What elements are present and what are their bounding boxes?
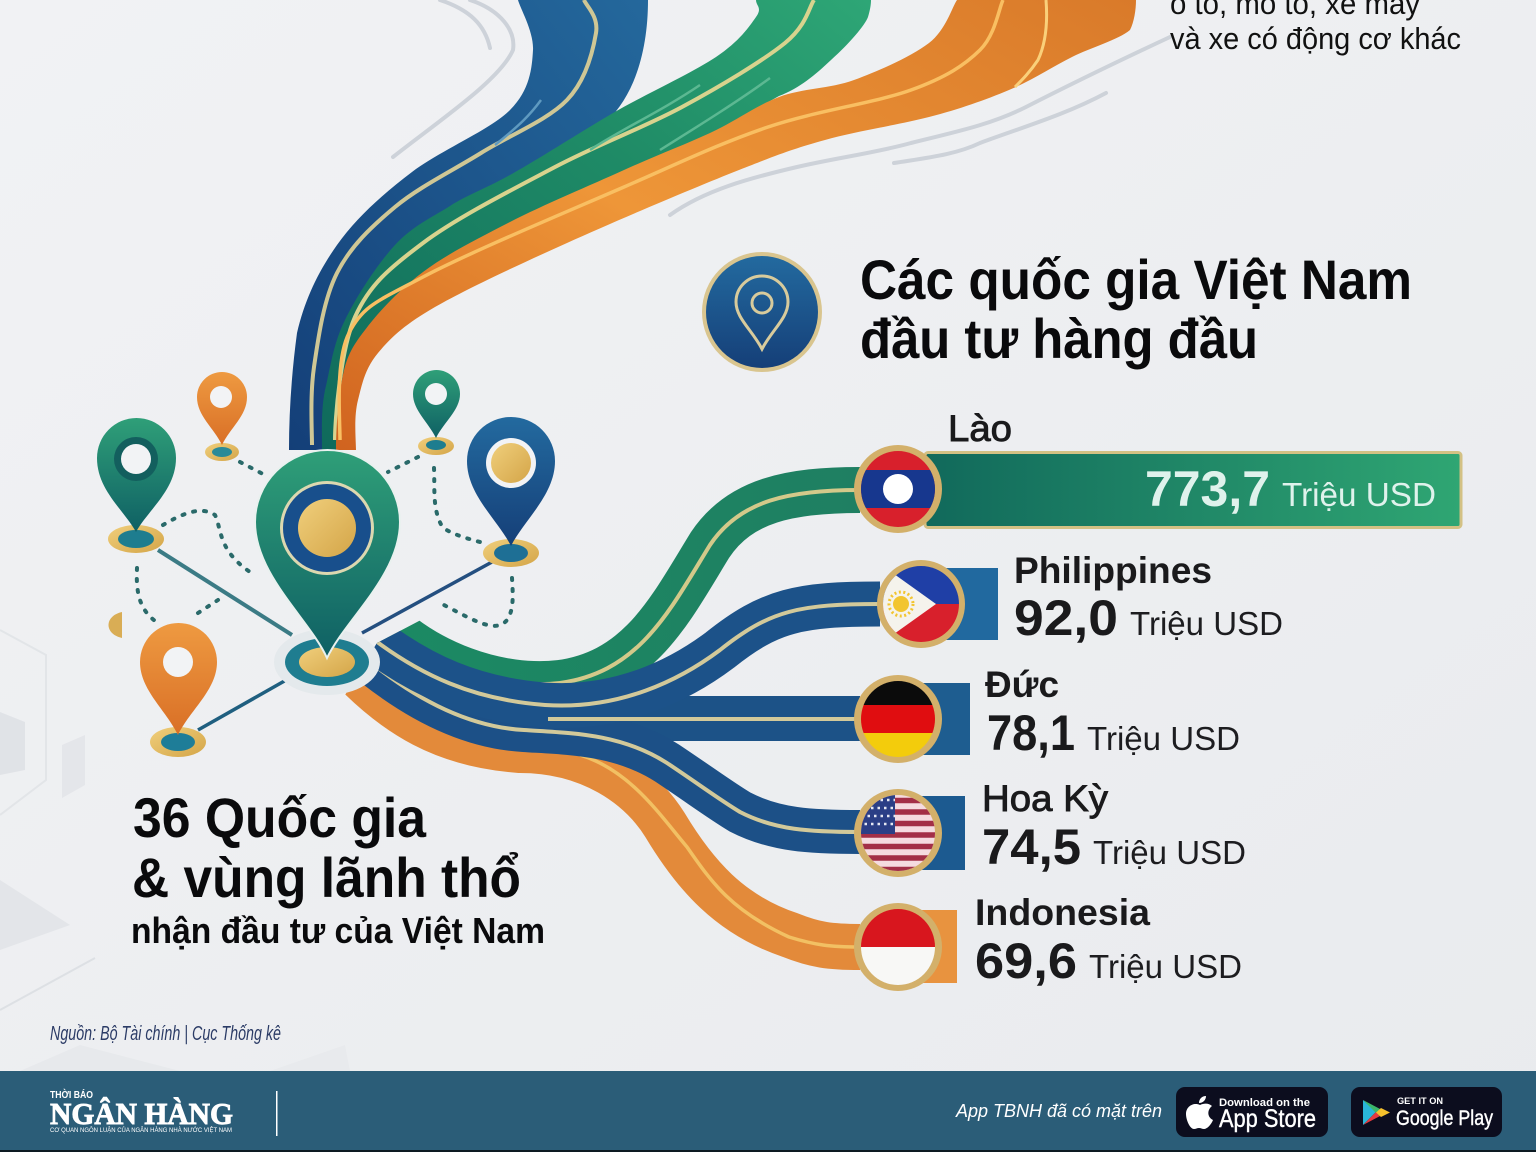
decorative swoosh lines (393, 0, 1170, 215)
unit: Triệu USD (1282, 476, 1436, 513)
flag: United States (854, 789, 942, 878)
section heading: đầu tư hàng đầu (860, 307, 1258, 370)
pin: main green (255, 450, 400, 695)
pin: small fragment (108, 612, 122, 638)
unit: Triệu USD (1087, 720, 1240, 757)
ribbon to United States: blue (345, 640, 965, 870)
source note: Nguồn: Bộ Tài chính | Cục Thống kê (50, 1023, 281, 1045)
ribbon to Germany: blue band (626, 683, 970, 755)
country label: Hoa Kỳ (982, 778, 1109, 819)
pin: orange lower (140, 623, 217, 757)
badge: Google Play (1351, 1087, 1502, 1137)
pins group (97, 370, 555, 757)
logo: NGÂN HÀNG (50, 1096, 233, 1131)
flag: Germany (854, 675, 942, 763)
row: Laos (854, 408, 1461, 533)
row: Philippines (877, 550, 1283, 648)
section heading (860, 248, 1412, 370)
logo: CƠ QUAN NGÔN LUẬN CỦA NGÂN HÀNG NHÀ NƯỚC VIỆT NAM (50, 1126, 232, 1134)
pin: blue right (467, 417, 555, 567)
value: 92,0 (1014, 590, 1118, 646)
ribbon to Laos: green (375, 490, 860, 684)
top caption (cropped) (1170, 0, 1461, 56)
ribbon to Indonesia: orange (345, 686, 957, 983)
connector lines (158, 550, 492, 730)
ribbon: orange (336, 0, 1136, 450)
unit: Triệu USD (1093, 834, 1246, 871)
top caption (cropped): và xe có động cơ khác (1170, 21, 1461, 56)
footer bar (0, 1071, 1536, 1150)
pin: orange top (197, 372, 247, 461)
country label: Philippines (1014, 550, 1212, 591)
badge: Google Play: GET IT ON (1397, 1096, 1443, 1106)
value: 773,7 (1145, 461, 1270, 517)
footer (0, 1071, 1536, 1152)
value bar (925, 452, 1461, 528)
ribbon to Philippines: blue (352, 568, 998, 706)
value: 74,5 (982, 819, 1081, 875)
row: Germany (854, 664, 1240, 763)
background geometric pattern (0, 630, 350, 1071)
flag: Laos (854, 445, 942, 533)
value: 69,6 (975, 933, 1077, 989)
section heading: Các quốc gia Việt Nam (860, 248, 1412, 311)
unit: Triệu USD (1130, 605, 1283, 642)
country label: Lào (948, 408, 1012, 449)
ribbon: blue (289, 0, 648, 450)
country label: Đức (985, 664, 1059, 705)
flag: Philippines (877, 560, 965, 648)
dotted routes (137, 457, 513, 626)
badge: App Store (1176, 1087, 1328, 1137)
ribbon: green (322, 0, 871, 450)
flag: Indonesia (854, 903, 942, 991)
badge: App Store: Download on the (1219, 1097, 1310, 1109)
upper ribbons (289, 0, 1136, 450)
row: Indonesia (854, 892, 1242, 991)
logo: THỜI BÁO (50, 1088, 93, 1101)
headline: 36 countries: & vùng lãnh thổ (132, 846, 521, 909)
header icon: location pin badge (702, 252, 822, 372)
country label: Indonesia (975, 892, 1150, 933)
row: United States (854, 778, 1246, 878)
badge: Google Play: Google Play (1396, 1107, 1493, 1130)
pin: green top right (413, 370, 460, 455)
badge: App Store: App Store (1219, 1105, 1316, 1133)
headline: 36 countries: nhận đầu tư của Việt Nam (131, 910, 545, 951)
ribbon to Germany: gold line (548, 717, 858, 721)
lower ribbons (335, 490, 998, 983)
pin: green left (97, 418, 176, 553)
footer divider (276, 1091, 278, 1136)
app promo text: App TBNH đã có mặt trên (955, 1101, 1162, 1121)
headline: 36 countries (131, 786, 545, 951)
unit: Triệu USD (1089, 948, 1242, 985)
headline: 36 countries: 36 Quốc gia (133, 786, 427, 849)
value: 78,1 (987, 705, 1075, 761)
